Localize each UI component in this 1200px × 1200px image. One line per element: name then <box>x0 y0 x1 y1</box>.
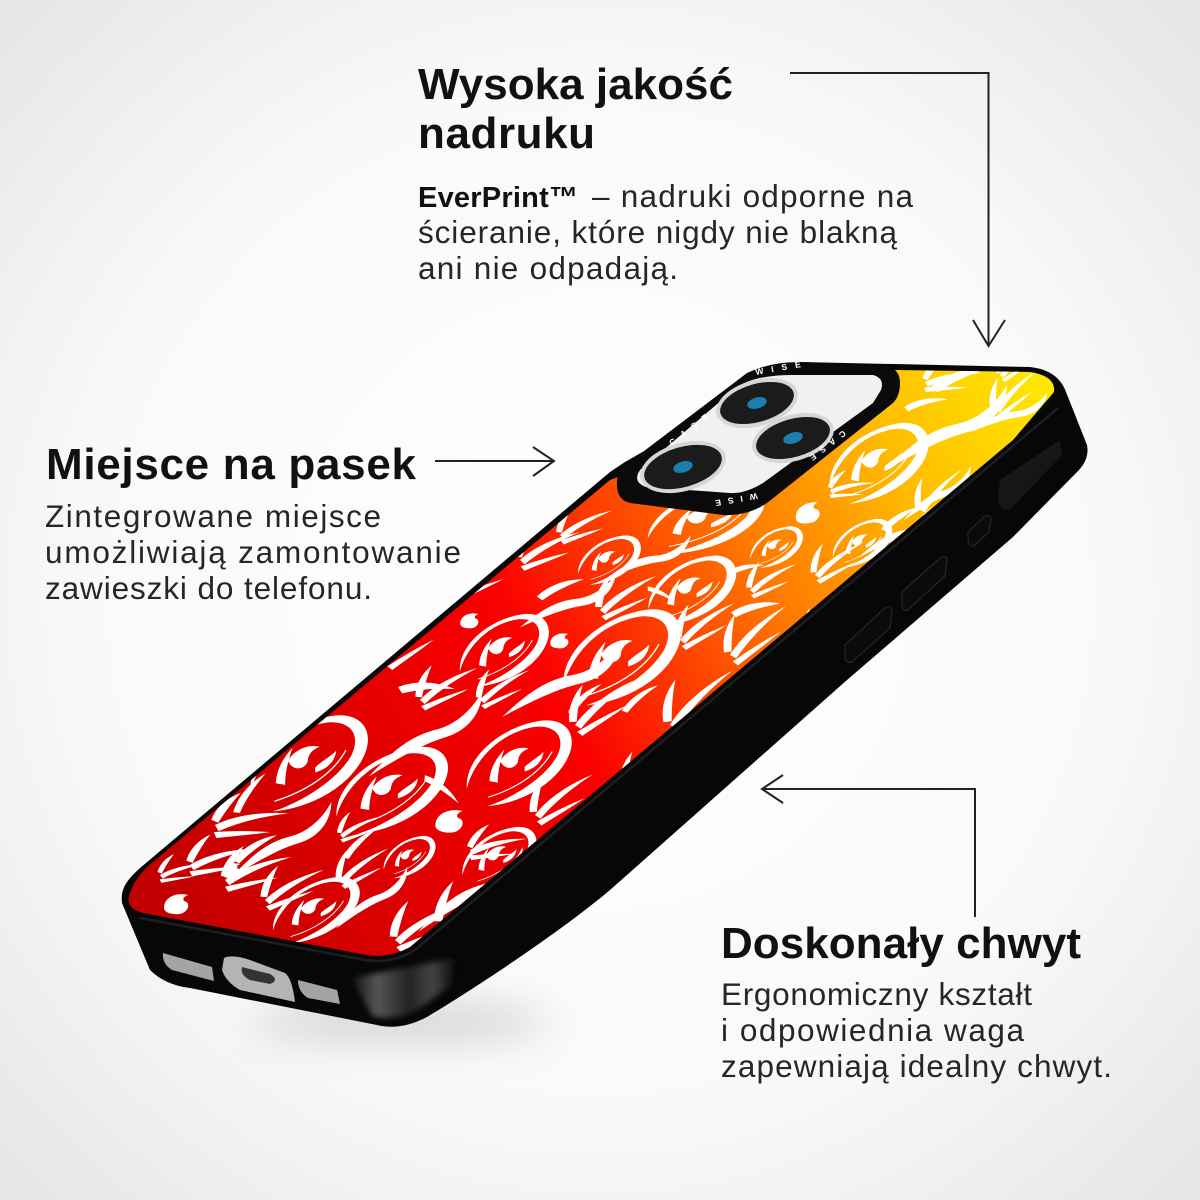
brand text bottom of ring: WISE <box>708 491 758 510</box>
arrow: top callout to phone <box>790 73 1005 346</box>
commas <box>435 810 463 833</box>
usb port <box>222 956 295 1002</box>
heading: nadruku <box>418 109 595 158</box>
large swirls <box>250 715 368 812</box>
bottom ports <box>163 953 340 1004</box>
sprays <box>158 854 194 883</box>
speaker right <box>298 980 340 1004</box>
heading <box>418 60 733 158</box>
brand text side of ring: CASE <box>803 428 848 467</box>
body text: zapewniają idealny chwyt. <box>721 1048 1112 1084</box>
body text: i odpowiednia waga <box>721 1012 1024 1048</box>
arrow: grip <box>762 775 975 917</box>
brand text top right: WISE <box>755 358 809 377</box>
camera island <box>617 362 900 515</box>
arrow: strap slot <box>435 447 554 476</box>
phone case <box>122 336 1088 1027</box>
body text: ani nie odpadają. <box>418 250 678 286</box>
phone shadow <box>250 1002 550 1042</box>
lens right <box>746 404 840 472</box>
body text: ścieranie, które nigdy nie blakną <box>418 214 897 250</box>
case body <box>122 362 1088 1027</box>
body text <box>418 178 913 286</box>
swirl pattern <box>157 336 1049 953</box>
body text <box>721 976 1112 1084</box>
heading: Miejsce na pasek <box>46 440 417 489</box>
bottom corner gloss <box>352 958 455 1018</box>
long curves <box>896 384 1007 464</box>
lens top <box>710 369 804 437</box>
callout: strap slot <box>45 440 461 606</box>
body text: – nadruki odporne na <box>592 178 913 214</box>
lens left <box>634 432 732 502</box>
printed back face <box>129 370 1054 956</box>
speaker left <box>163 953 214 981</box>
callout: grip <box>721 919 1112 1084</box>
callout: print quality <box>418 60 913 286</box>
heading: Doskonały chwyt <box>721 919 1081 968</box>
usb opening <box>242 967 275 984</box>
body text: zawieszki do telefonu. <box>45 570 372 606</box>
body text: Zintegrowane miejsce <box>45 498 381 534</box>
brand text top of ring: CASE <box>667 407 716 448</box>
body text: EverPrint™ <box>418 182 578 214</box>
side rim highlight <box>140 408 1058 961</box>
leaves <box>398 682 454 694</box>
body text: Ergonomiczny kształt <box>721 976 1032 1012</box>
side buttons <box>845 440 1062 662</box>
body text: umożliwiają zamontowanie <box>45 534 461 570</box>
camera window <box>637 375 882 493</box>
body text <box>45 498 461 606</box>
heading: Wysoka jakość <box>418 60 733 109</box>
